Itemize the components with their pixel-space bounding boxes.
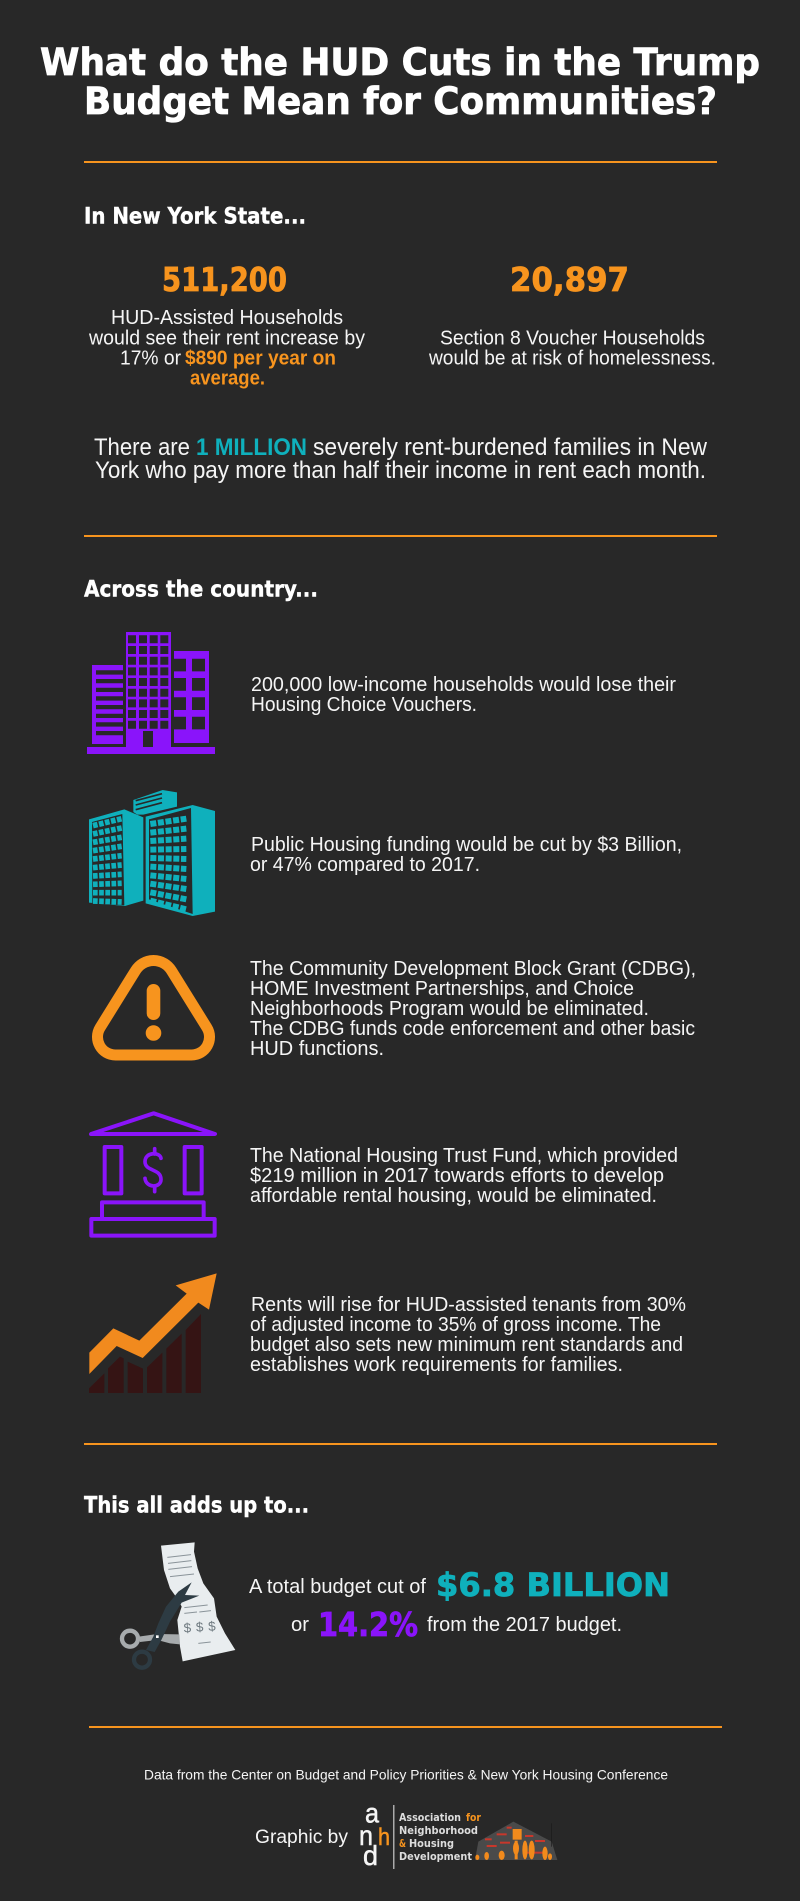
- text: rents will rise: establishes work requirements for families.: [250, 1354, 623, 1376]
- icon: scissors cutting budget paper: $ $ $: [183, 1618, 217, 1636]
- text: total budget cut: A total budget cut of: [249, 1576, 426, 1598]
- callout: 1 million rent-burdened families: severely rent-burdened families in New: [313, 434, 708, 461]
- stat: 20,897 voucher households: [428, 260, 716, 370]
- icon: warning triangle: [97, 960, 210, 1055]
- heading: In New York State: In New York State...: [84, 204, 306, 230]
- text: national housing trust fund: The National Housing Trust Fund, which provided: [250, 1145, 678, 1167]
- icon: purple apartment buildings: [87, 632, 215, 754]
- text: programs eliminated: HUD functions.: [250, 1038, 384, 1060]
- text: public housing funding: [250, 834, 682, 876]
- text: total budget cut: from the 2017 budget.: [427, 1614, 622, 1636]
- text: programs eliminated: Neighborhoods Program would be eliminated.: [250, 998, 649, 1020]
- logo: ANHD: h: [378, 1824, 390, 1851]
- stat: 511,200 households: $890 per year on: [185, 348, 336, 370]
- text: programs eliminated: [250, 958, 696, 1060]
- logo: ANHD: a: [365, 1798, 379, 1828]
- text: national housing trust fund: [250, 1145, 678, 1207]
- text: national housing trust fund: affordable rental housing, would be eliminated.: [250, 1185, 657, 1207]
- callout: 1 million rent-burdened families: York who pay more than half their income in rent each month.: [95, 457, 706, 484]
- text: housing choice vouchers: [251, 674, 676, 716]
- text: graphic by: Graphic by: [255, 1827, 349, 1848]
- text: programs eliminated: The CDBG funds code enforcement and other basic: [250, 1018, 695, 1040]
- logo: ANHD: Housing: [409, 1838, 454, 1850]
- callout: 1 million rent-burdened families: [94, 434, 708, 484]
- heading: Across the country: Across the country...: [84, 578, 318, 602]
- logo: ANHD: for: [466, 1812, 482, 1824]
- text: rents will rise: of adjusted income to 35% of gross income. The: [250, 1314, 661, 1336]
- text: housing choice vouchers: 200,000 low-income households would lose their: [251, 674, 676, 696]
- text: national housing trust fund: $219 million in 2017 towards efforts to develop: [250, 1165, 664, 1187]
- title: Budget Mean for Communities?: [84, 80, 717, 123]
- logo: ANHD: &: [399, 1838, 406, 1850]
- logo: ANHD: Association: [399, 1812, 461, 1824]
- stat: 20,897 voucher households: would be at risk of homelessness.: [428, 348, 716, 370]
- icon: rising arrow over bars: [89, 1273, 217, 1393]
- stat: 511,200 households: 511,200: [162, 260, 287, 299]
- title: [40, 41, 760, 123]
- callout: 1 million rent-burdened families: 1 MILLION: [196, 434, 307, 461]
- stat: 511,200 households: [88, 260, 365, 390]
- logo: ANHD: Neighborhood: [399, 1825, 478, 1837]
- text: rents will rise: budget also sets new minimum rent standards and: [250, 1334, 683, 1356]
- logo: ANHD: Development: [399, 1851, 472, 1863]
- title: What do the HUD Cuts in the Trump: [40, 41, 760, 84]
- text: programs eliminated: HOME Investment Partnerships, and Choice: [250, 978, 634, 1000]
- stat: 511,200 households: 17% or: [120, 348, 181, 370]
- text: total budget cut: $6.8 BILLION: [436, 1566, 670, 1604]
- text: housing choice vouchers: Housing Choice Vouchers.: [251, 694, 477, 716]
- text: total budget cut: or: [291, 1614, 309, 1636]
- icon: teal office towers: [89, 790, 215, 916]
- text: public housing funding: or 47% compared to 2017.: [250, 854, 480, 876]
- text: programs eliminated: The Community Development Block Grant (CDBG),: [250, 958, 696, 980]
- callout: 1 million rent-burdened families: There are: [94, 434, 190, 461]
- stat: 20,897 voucher households: 20,897: [510, 260, 629, 299]
- heading: This all adds up to: This all adds up to...: [84, 1494, 309, 1518]
- text: public housing funding: Public Housing funding would be cut by $3 Billion,: [251, 834, 682, 856]
- icon: scissors cutting budget paper: [122, 1542, 235, 1668]
- stat: 511,200 households: HUD-Assisted Households: [111, 307, 343, 329]
- text: total budget cut: [249, 1566, 670, 1644]
- text: data source: Data from the Center on Budget and Policy Priorities & New York Housing Conference: [144, 1766, 668, 1782]
- logo: ANHD: n: [359, 1820, 373, 1851]
- stat: 511,200 households: would see their rent increase by: [88, 328, 365, 350]
- logo: ANHD: d: [363, 1840, 378, 1871]
- stat: 511,200 households: average.: [190, 368, 265, 390]
- icon: bank with dollar sign: [91, 1113, 215, 1236]
- logo: ANHD: [359, 1798, 557, 1871]
- stat: 20,897 voucher households: Section 8 Voucher Households: [440, 328, 705, 350]
- text: rents will rise: [250, 1294, 686, 1376]
- text: total budget cut: 14.2%: [318, 1605, 418, 1644]
- text: rents will rise: Rents will rise for HUD-assisted tenants from 30%: [251, 1294, 686, 1316]
